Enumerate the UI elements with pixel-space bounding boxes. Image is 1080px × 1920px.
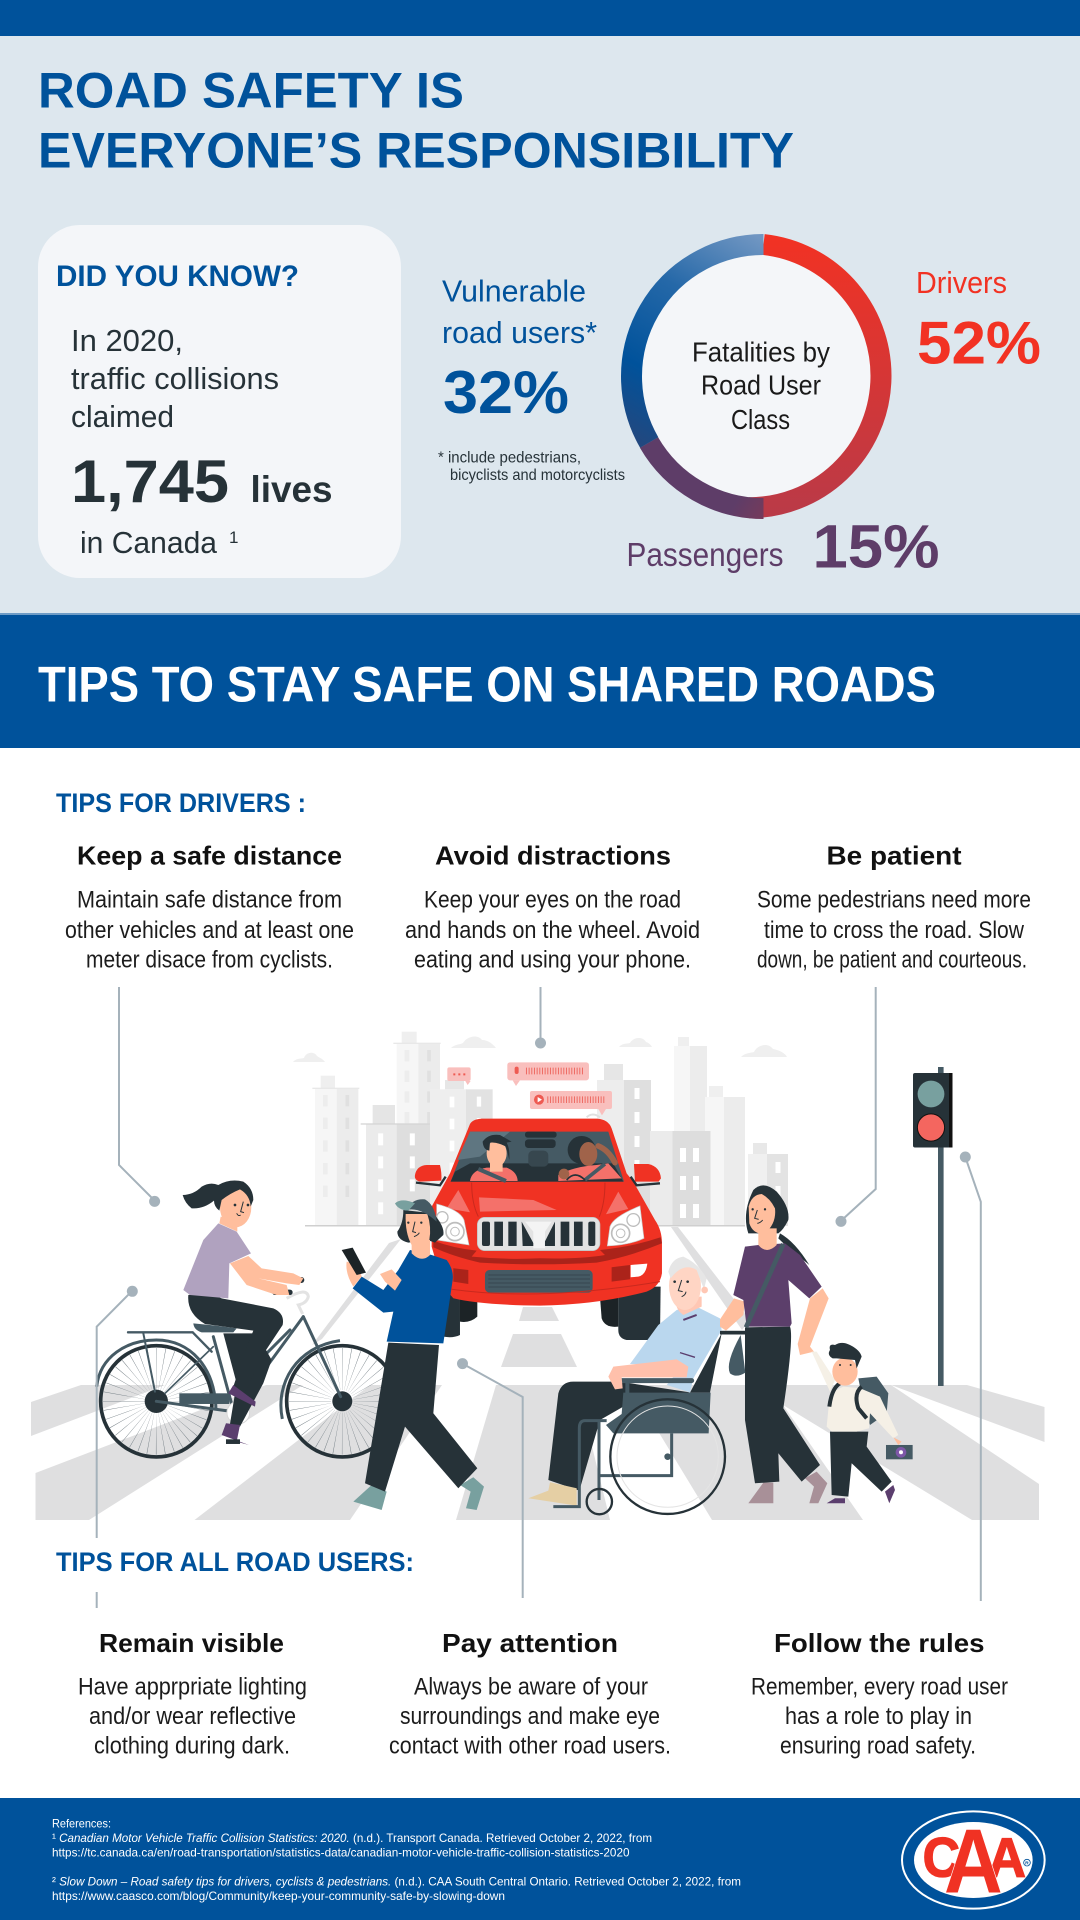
tip: remain visible: and/or wear reflective [89,1703,296,1730]
tip: avoid distractions: Keep your eyes on the road [424,886,681,914]
tip: follow the rules: Remember, every road user [751,1674,1008,1700]
references [52,1816,741,1903]
pedestrian with phone [342,1199,484,1510]
footer panel [0,1798,1080,1920]
heading: did you know: DID YOU KNOW? [56,260,299,293]
references: References: [52,1816,111,1830]
tip: pay attention: surroundings and make eye [400,1703,660,1730]
stat: 1,745 lives: lives [250,469,332,510]
logo: CAA [902,1811,1045,1913]
text: in 2020 traffic collisions claimed: claimed [71,399,174,434]
leader line: avoid distractions [535,987,546,1048]
wheelchair [690,1333,745,1393]
tip: follow the rules: has a role to play in [785,1703,972,1730]
road crosswalk [31,1227,1044,1520]
top bar [0,0,1080,36]
text: in Canada: in Canada [80,525,218,560]
car [415,1114,662,1340]
donut centre label [692,336,830,435]
tip: be patient: Some pedestrians need more [757,886,1031,914]
tip: avoid distractions: eating and using your phone. [414,946,691,974]
clouds [293,1036,787,1062]
tip: avoid distractions: and hands on the wheel. Avoid [405,917,700,944]
label: vulnerable road users: 32% [443,359,569,426]
panel: statistics background [0,36,1080,613]
stat: 1,745 lives: 1,745 [71,448,229,515]
logo: CAA: R [1025,1860,1029,1866]
tip: be patient: time to cross the road. Slow [764,917,1025,944]
cyclist body [183,1181,303,1445]
panel: did you know [38,225,401,578]
heading: tips for all road users: TIPS FOR ALL ROAD USERS: [56,1547,414,1577]
label: drivers 52% [916,265,1041,376]
logo: CAA: A [988,1826,1026,1889]
stat: 1,745 lives [71,448,332,515]
wheelchair frame and wheels [553,1359,725,1514]
title: EVERYONE’S RESPONSIBILITY [38,122,794,178]
leader line: remain visible [97,1286,138,1608]
car passenger left [470,1135,518,1181]
tip: pay attention [389,1628,671,1760]
woman pushing wheelchair [720,1185,829,1503]
leader line: follow the rules [960,1152,981,1601]
donut centre label: Road User [701,370,821,400]
tip: keep a safe distance: Keep a safe distance [77,840,342,870]
label: drivers 52%: Drivers [916,265,1007,300]
references: https://tc.canada.ca/en/road-transportation/statistics-data/canadian-motor-vehicle-traffic-collision-statistics-2020 [52,1846,630,1860]
references: ² Slow Down – Road safety tips for drivers, cyclists & pedestrians. (n.d.). CAA South Central Ontario. Retrieved October 2, 2022, from [52,1874,741,1888]
label: drivers 52%: 52% [917,310,1041,376]
tip: keep a safe distance [65,840,354,974]
tip: remain visible: Have apprpriate lighting [78,1674,307,1700]
text: in 2020 traffic collisions claimed [71,323,279,434]
donut centre label: Fatalities by [692,336,830,368]
child with backpack [812,1343,913,1503]
footnote: vulnerable users: * include pedestrians, [438,450,581,466]
tip: remain visible: Remain visible [99,1628,284,1658]
references: ¹ Canadian Motor Vehicle Traffic Collision Statistics: 2020. (n.d.). Transport Canada. Retrieved October 2, 2022, from [52,1831,652,1845]
footnote: vulnerable users [438,450,625,484]
traffic light [913,1067,952,1386]
tip: remain visible [78,1628,307,1760]
section banner: tips to stay safe [0,613,1080,748]
car driver right [558,1136,622,1181]
tip: be patient [757,840,1031,974]
heading: tips for drivers: TIPS FOR DRIVERS : [56,788,306,818]
tip: be patient: Be patient [826,840,962,870]
tip: follow the rules [751,1628,1008,1760]
tip: avoid distractions: Avoid distractions [435,840,671,870]
label: passengers 15% [626,512,940,580]
title: ROAD SAFETY IS [38,62,464,118]
tip: follow the rules: ensuring road safety. [780,1732,976,1760]
footnote: vulnerable users: bicyclists and motorcyclists [450,467,625,484]
label: passengers 15%: Passengers [626,536,784,573]
bicycle [97,1277,398,1457]
tip: pay attention: Always be aware of your [414,1674,648,1700]
tip: remain visible: clothing during dark. [94,1732,290,1760]
leader line: be patient [836,987,876,1227]
donut chart: fatalities by road user class [632,244,888,509]
tip: avoid distractions [405,840,700,974]
donut centre label: Class [731,404,790,435]
skyline buildings [293,1032,788,1226]
section banner: tips to stay safe: TIPS TO STAY SAFE ON SHARED ROADS [38,656,936,712]
title [38,62,794,178]
tip: pay attention: Pay attention [442,1628,618,1658]
logo: CAA: A [944,1811,1003,1913]
tip: keep a safe distance: Maintain safe distance from [77,886,342,914]
leader line: pay attention [457,1358,523,1598]
tip: follow the rules: Follow the rules [774,1628,984,1658]
text: in 2020 traffic collisions claimed: traffic collisions [71,361,279,396]
text: in 2020 traffic collisions claimed: In 2020, [71,323,183,358]
illustration: road crossing scene [31,987,1044,1608]
tip: pay attention: contact with other road users. [389,1732,671,1760]
tip: keep a safe distance: meter disace from cyclists. [86,946,333,974]
label: vulnerable road users [442,274,597,426]
man body [528,1257,722,1506]
text: in Canada: 1 [229,528,238,547]
cyclist [97,1181,398,1457]
label: vulnerable road users: Vulnerable [442,274,586,308]
person in wheelchair [528,1257,745,1514]
label: passengers 15%: 15% [812,512,940,580]
references: https://www.caasco.com/blog/Community/keep-your-community-safe-by-slowing-down [52,1889,505,1903]
leader line: keep a safe distance [119,987,160,1207]
logo: CAA: C [923,1825,960,1888]
speech bubbles [447,1062,612,1115]
tip: keep a safe distance: other vehicles and at least one [65,917,354,944]
label: vulnerable road users: road users* [442,315,597,350]
